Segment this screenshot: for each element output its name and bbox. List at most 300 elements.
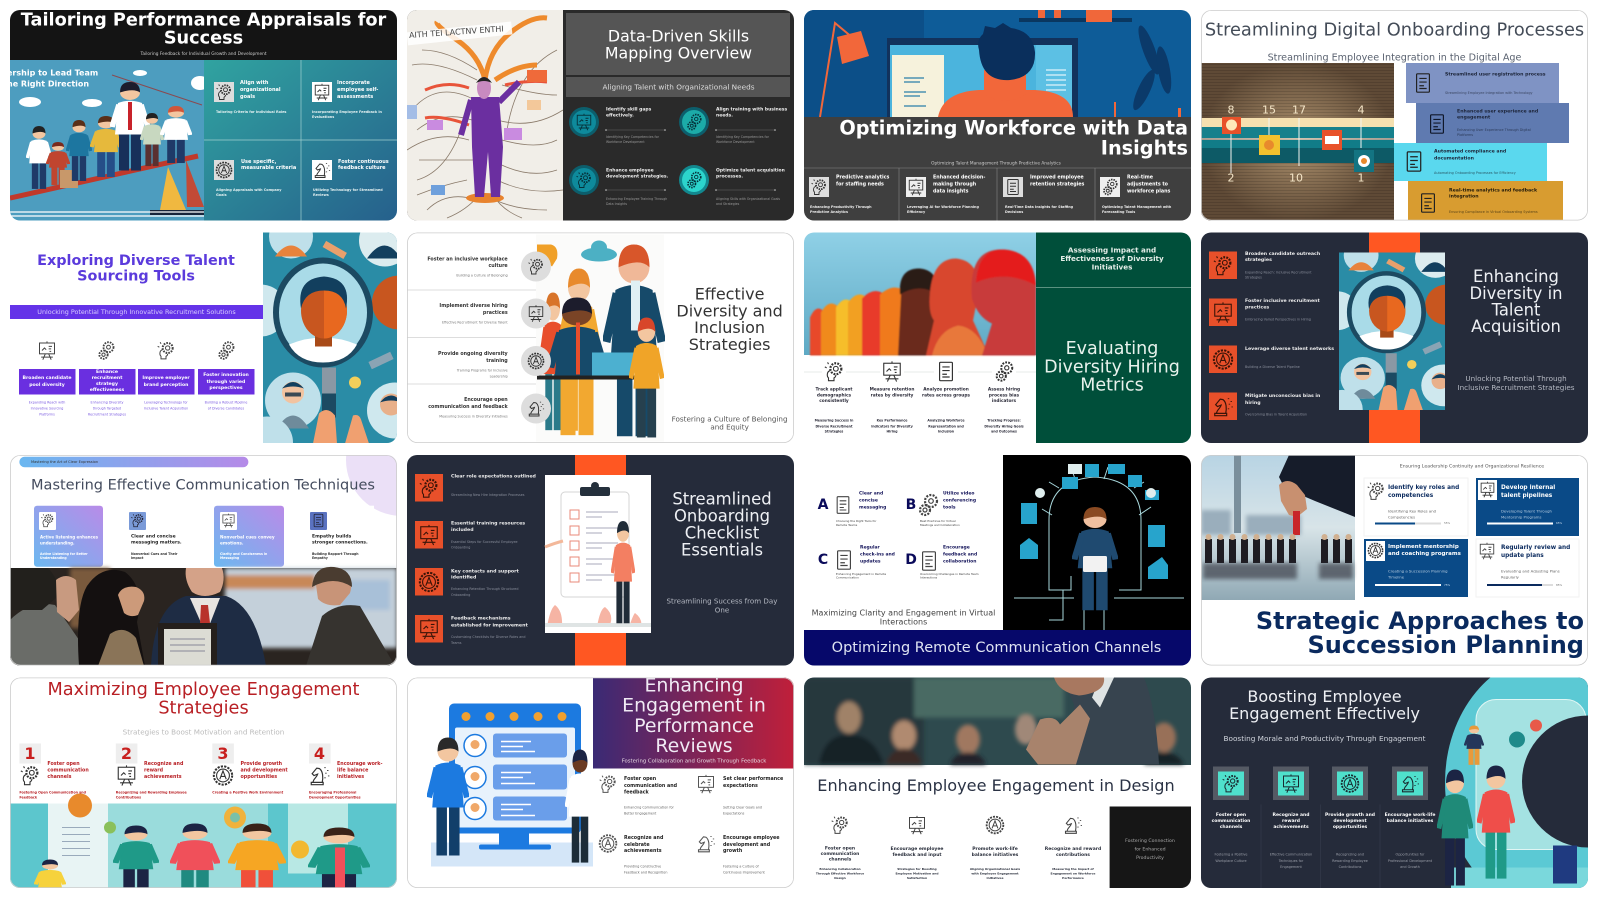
- card edge: [1201, 455, 1588, 665]
- item: role expectations: Clear role expectations outlined: [451, 474, 536, 480]
- step 1: Foster open: [47, 761, 80, 767]
- title: Essentials: [681, 540, 763, 560]
- column: feedback: Satisfaction: [907, 876, 927, 880]
- item: training: training: [486, 358, 508, 364]
- title: [48, 680, 360, 718]
- column: rewards: Engagement on Workforce: [1051, 872, 1095, 876]
- title: Maximizing Employee Engagement: [48, 680, 360, 700]
- heading: Effectiveness of Diversity: [1060, 254, 1164, 263]
- card: Maximizing Employee Engagement Strategies: [10, 678, 397, 900]
- card: Enhancing Diversity in Talent Acquisition: [1201, 232, 1588, 444]
- item: outreach: [1209, 251, 1320, 280]
- cell: review plans: Regularly: [1501, 574, 1520, 580]
- title: Tailoring Performance Appraisals for: [21, 10, 387, 30]
- item B: video: B: [906, 497, 916, 513]
- item: development strategies: Enhance employee: [606, 168, 654, 174]
- illustration: remote worker network: [1003, 455, 1191, 630]
- cell: predictive analytics: [809, 174, 889, 214]
- metric: retention: Indicators for Diversity: [871, 424, 914, 428]
- card: Strategic Approaches to Succession Planning: [1201, 455, 1588, 666]
- cell: measurable criteria: Use specific,: [241, 159, 276, 165]
- title: Strategies: [158, 698, 249, 718]
- step 4: Development Opportunities: [309, 796, 361, 800]
- caption: [812, 608, 995, 626]
- column: rewards: Performance: [1062, 876, 1084, 880]
- title: Evaluating: [1066, 339, 1158, 359]
- column: feedback: [891, 816, 943, 880]
- illustration: magnifier over candidates: [235, 214, 426, 468]
- title: Diversity in: [1469, 284, 1563, 303]
- column: recruitment: effectiveness: [90, 387, 124, 393]
- item: clear expectations: Expectations: [723, 812, 745, 816]
- illustration: teal scene with colleagues: [1439, 654, 1600, 900]
- step: experience: Platforms: [1457, 133, 1473, 137]
- metric: bias: [984, 360, 1024, 434]
- item B: video: conferencing: [943, 498, 976, 504]
- card: Evaluating Diversity Hiring Metrics: [804, 232, 1191, 444]
- cell: key roles: Competencies: [1388, 514, 1415, 520]
- item: outreach: strategies: [1245, 257, 1272, 263]
- item: training resources: Essential training resources: [451, 520, 525, 526]
- subtitle band: Unlocking Potential Through Innovative Recruitment Solutions: [37, 308, 236, 316]
- subtitle band: [10, 305, 263, 319]
- step 3: 3: [217, 744, 229, 763]
- column: feedback: Encourage employee: [891, 846, 943, 852]
- title band: [804, 630, 1191, 666]
- step 4: Encouraging Professional: [309, 790, 356, 794]
- column: feedback: Strategies for Boosting: [897, 867, 937, 871]
- item C: check-ins: [818, 544, 895, 580]
- title panel: Engagement in: [622, 694, 766, 716]
- item: training resources: [415, 520, 525, 550]
- column: candidate pool: Broaden candidate: [23, 375, 71, 381]
- step 4: [309, 744, 382, 800]
- step: experience: [1416, 103, 1569, 143]
- step 1: Fostering Open Communication and: [19, 790, 87, 794]
- card: empathy: stronger connections.: [312, 540, 368, 546]
- cell: decision making: Efficiency: [907, 210, 926, 214]
- title: [1044, 339, 1180, 396]
- cell: mentorship: Timeline: [1387, 574, 1405, 580]
- cell: feedback culture: Utilizing Technology for Streamlined: [313, 188, 383, 192]
- card: concise messaging: Nonverbal Cues and Their: [131, 552, 178, 556]
- title panel: Fostering Collaboration and Growth Through Feedback: [622, 758, 767, 764]
- item: feedback: Teams: [450, 641, 462, 645]
- card: nonverbal cues: Messaging: [220, 556, 240, 560]
- item: skill gaps: Workforce Development: [606, 140, 645, 144]
- title: Strategic Approaches to: [1256, 607, 1584, 635]
- item B: video: Best Practices for Virtual: [920, 519, 956, 523]
- metric: bias: Tracking Progress:: [987, 418, 1021, 422]
- column: rewards: contributions: [1056, 852, 1090, 858]
- item: training: Leadership: [490, 374, 508, 378]
- item: align training: Workforce Development: [716, 140, 755, 144]
- title: Checklist: [685, 524, 760, 542]
- accent strip: [1369, 232, 1420, 444]
- column: innovation: perspectives: [209, 385, 243, 391]
- cell: decision making: [906, 174, 985, 214]
- cell: real-time: workforce plans: [1127, 188, 1171, 194]
- title: Succession Planning: [1307, 631, 1584, 659]
- card: nonverbal cues: Nonverbal cues convey: [220, 534, 275, 540]
- item: celebrate: celebrate: [624, 842, 650, 848]
- step: experience: Enhancing User Experience Through Digital: [1457, 128, 1531, 132]
- item: networks: Leverage diverse talent networks: [1245, 346, 1334, 352]
- cell: review plans: Regularly review and: [1501, 545, 1570, 551]
- card: empathy: Empathy builds: [312, 534, 352, 540]
- column: work-life: Initiatives: [986, 876, 1004, 880]
- heading: Assessing Impact and: [1068, 246, 1156, 254]
- column: recognition: [1270, 766, 1312, 869]
- item: development: Fostering a Culture of: [723, 864, 759, 868]
- card: concise messaging: Clear and concise: [131, 534, 176, 540]
- item: talent acquisition: Optimize talent acquisition: [716, 168, 785, 174]
- item D: collaboration: Encourage: [943, 544, 970, 550]
- metric: demographics: [815, 360, 854, 434]
- cell: align goals: Tailoring Criteria for Individual Roles: [216, 110, 286, 114]
- card: concise messaging: [124, 506, 193, 567]
- step: experience: Enhanced user experience and: [1457, 108, 1538, 114]
- photo: hand selecting a figure: [1201, 455, 1355, 600]
- cell: align goals: [214, 80, 286, 114]
- callout box: Fostering Connection: [1125, 838, 1175, 844]
- step 2: [116, 744, 187, 800]
- card: Data-Driven Skills Mapping Overview: [407, 10, 794, 221]
- item: communication: Encourage open: [464, 397, 508, 403]
- cell: key roles: Identify key roles and: [1388, 485, 1459, 491]
- step 2: achievements: [144, 774, 182, 780]
- panel: title panel: [1036, 232, 1191, 444]
- title: Mastering Effective Communication Techniques: [31, 478, 375, 494]
- cell: decision making: Leveraging AI for Workforce Planning: [907, 205, 979, 209]
- item: talent acquisition: [679, 165, 785, 206]
- item: development strategies: Enhancing Employee Training Through: [606, 197, 667, 201]
- column: balance: [1385, 766, 1435, 869]
- item: clear expectations: Setting Clear Goals and: [723, 806, 762, 810]
- item: bias: [1209, 392, 1320, 420]
- title panel: Enhancing: [644, 674, 744, 696]
- column: innovation: Foster innovation: [203, 372, 249, 378]
- item B: video: Utilize video: [943, 490, 975, 496]
- item: open communication: feedback: [624, 790, 650, 796]
- item A: messaging: concise: [859, 498, 878, 504]
- cell: mentorship: Implement mentorship: [1388, 544, 1459, 550]
- metric: promotion: Inclusion: [938, 430, 955, 434]
- item: talent acquisition: and Strategies: [716, 202, 740, 206]
- item: bias: Overcoming Bias in Talent Acquisition: [1245, 412, 1307, 416]
- item: inclusive culture: [427, 252, 551, 282]
- subtitle box: [566, 77, 790, 97]
- column: rewards: Recognize and reward: [1045, 846, 1101, 852]
- item: clear expectations: Set clear performance: [723, 776, 784, 782]
- title: Effective: [695, 284, 765, 304]
- illustration: mind map figure: AITH TEI LACTNV ENTHI: [409, 24, 504, 40]
- column: candidate pool: Platforms: [39, 412, 55, 416]
- item: diverse hiring: practices: [483, 310, 508, 316]
- item: development: development and: [723, 842, 771, 848]
- cell: review plans: Evaluating and Adjusting Plans: [1501, 568, 1560, 574]
- item C: check-ins: updates: [860, 558, 881, 564]
- column: communication: Foster open: [1216, 812, 1246, 818]
- dark circle overlay: [1522, 716, 1600, 848]
- item B: video: [906, 490, 976, 527]
- column: recognition: Engagement: [1280, 865, 1302, 869]
- cell: mentorship: Creating a Succession Planning: [1388, 568, 1448, 574]
- column: innovation: through varied: [207, 379, 245, 385]
- cell: key roles: [1364, 478, 1468, 536]
- item: celebrate: Feedback and Recognition: [624, 870, 667, 874]
- item: skill gaps: effectively.: [606, 112, 634, 118]
- item D: collaboration: Interactions: [920, 576, 938, 580]
- illustration: timeline on wood: 17: [1292, 104, 1306, 116]
- step: compliance: [1394, 143, 1547, 181]
- cell: review plans: [1476, 539, 1579, 597]
- step 4: Encourage work-: [337, 761, 382, 767]
- item: practices: Foster inclusive recruitment: [1245, 298, 1320, 304]
- cell: key roles: competencies: [1388, 493, 1434, 499]
- title band: Optimizing Remote Communication Channels: [832, 640, 1161, 656]
- column: recognition: achievements: [1273, 824, 1309, 830]
- step 2: Recognize and: [144, 761, 184, 767]
- step: registration: Streamlining Employee Integration with Technology: [1445, 91, 1533, 95]
- column: work-life: [970, 817, 1020, 880]
- column: open communication: Foster open: [825, 846, 855, 852]
- title: [676, 284, 783, 354]
- item: networks: [1209, 346, 1334, 373]
- column: balance: and Growth: [1400, 865, 1420, 869]
- illustration: team on a seesaw boat: [7, 60, 209, 221]
- column: employer brand: [138, 342, 194, 410]
- cell: self-assessments: Incorporate: [337, 80, 371, 86]
- metric: retention: Hiring: [887, 430, 898, 434]
- step 1: communication: [47, 768, 89, 774]
- panel: four criteria: [204, 60, 397, 221]
- step: registration: [1406, 63, 1559, 103]
- cell: decision making: making through: [933, 182, 977, 188]
- cell: predictive analytics: Predictive analytics: [836, 174, 889, 180]
- item: key contacts: identified: [451, 574, 476, 580]
- accent strip: [575, 455, 626, 666]
- step: analytics: Real-time analytics and feedback: [1449, 188, 1538, 194]
- cell: retention: Real-Time Data Insights for Staffing: [1005, 205, 1074, 209]
- step: compliance: Automating Onboarding Processes for Efficiency: [1434, 171, 1516, 175]
- step 1: channels: [47, 774, 72, 780]
- title box: [566, 13, 790, 75]
- cell: retention: Improved employee: [1030, 174, 1084, 180]
- card: active listening: understanding.: [40, 540, 75, 546]
- tag pill: Mastering the Art of Clear Expression: [31, 460, 98, 464]
- item C: check-ins: C: [818, 552, 828, 568]
- item: development strategies: Data Insights: [606, 202, 627, 206]
- item D: collaboration: Overcoming Challenges in Remote Team: [920, 572, 979, 576]
- step 3: opportunities: [240, 774, 277, 780]
- step 4: initiatives: [337, 774, 364, 780]
- subtitle: Fostering a Culture of Belonging: [672, 414, 788, 424]
- item: inclusive culture: culture: [488, 263, 508, 269]
- metric: demographics: Diverse Recruitment: [816, 424, 853, 428]
- column: recruitment: strategy: [96, 381, 118, 387]
- title: [839, 116, 1188, 160]
- illustration: magnifier: [1317, 239, 1468, 429]
- step 2: Recognizing and Rewarding Employee: [116, 790, 187, 794]
- cell: talent pipelines: Developing Talent Through: [1501, 508, 1553, 514]
- item: bias: hiring: [1245, 400, 1261, 406]
- item: communication: communication and feedback: [428, 404, 509, 410]
- item: bias: Mitigate unconscious bias in: [1245, 393, 1320, 399]
- column: open communication: [816, 817, 864, 880]
- cell: self-assessments: assessments: [337, 94, 373, 100]
- subtitle: Boosting Morale and Productivity Through Engagement: [1223, 734, 1426, 743]
- cell: self-assessments: Evaluations: [312, 115, 334, 119]
- column: rewards: [1045, 818, 1101, 880]
- title: Enhancing Employee Engagement in Design: [817, 776, 1175, 795]
- cell: talent pipelines: talent pipelines: [1501, 493, 1553, 499]
- decorative corner circle: [346, 404, 458, 516]
- metric: promotion: rates across groups: [922, 392, 970, 398]
- callout box: Productivity: [1136, 855, 1164, 861]
- column: employer brand: brand perception: [144, 382, 188, 388]
- item: align training: needs.: [716, 112, 733, 118]
- item A: messaging: [818, 490, 886, 527]
- card: active listening: Active Listening for Better: [40, 552, 88, 556]
- step 3: and development: [240, 768, 288, 774]
- illustration: mind map figure: [407, 10, 563, 221]
- title: [1229, 687, 1420, 723]
- card: Streamlined Onboarding Checklist Essentials: [407, 455, 794, 666]
- heading: [1060, 246, 1164, 272]
- item C: check-ins: Regular: [860, 544, 881, 550]
- column: employer brand: Leveraging Technology for: [144, 400, 188, 404]
- item: inclusive culture: Foster an inclusive workplace: [427, 256, 508, 262]
- cell: measurable criteria: measurable criteria: [241, 165, 296, 171]
- cell: retention: retention strategies: [1030, 182, 1085, 188]
- item D: collaboration: feedback and: [943, 552, 977, 558]
- title: Sourcing Tools: [77, 268, 195, 284]
- item: networks: Building a Diverse Talent Pipeline: [1245, 365, 1300, 369]
- item A: messaging: Remote Teams: [836, 523, 858, 527]
- card: Boosting Employee Engagement Effectively: [1201, 654, 1600, 900]
- cell: talent pipelines: [1476, 478, 1579, 536]
- cell: retention: [1003, 174, 1085, 214]
- item: open communication: communication and: [624, 783, 678, 789]
- title: Streamlined: [672, 490, 772, 508]
- callout box: [1110, 806, 1192, 888]
- illustration: timeline on wood: 15: [1262, 104, 1276, 116]
- cell: mentorship: [1364, 539, 1468, 597]
- item: development: [698, 835, 780, 874]
- item: align training: Identifying Key Competencies for: [716, 135, 770, 139]
- column: rewards: Measuring the Impact of: [1052, 867, 1094, 871]
- column: candidate pool: Innovative Sourcing: [31, 406, 63, 410]
- column: communication: Workplace Culture: [1215, 859, 1247, 863]
- item: celebrate: Recognize and: [624, 835, 664, 841]
- item: outreach: Broaden candidate outreach: [1245, 251, 1320, 257]
- card: nonverbal cues: emotions.: [220, 540, 244, 546]
- metric: bias: process bias: [989, 392, 1020, 398]
- step 4: 4: [314, 744, 325, 763]
- illustration: timeline on wood: 1: [1358, 172, 1364, 184]
- item: key contacts: Key contacts and support: [451, 568, 519, 574]
- title panel: Performance: [634, 715, 754, 737]
- metric: retention: rates by diversity: [871, 392, 914, 398]
- column: recognition: Techniques for: [1278, 859, 1304, 863]
- column: recognition: Effective Communication: [1270, 852, 1312, 856]
- title: Talent: [1491, 300, 1541, 320]
- item A: messaging: A: [818, 497, 829, 513]
- column: recognition: reward: [1282, 818, 1300, 824]
- item: diverse hiring: Implement diverse hiring: [439, 303, 508, 309]
- column: work-life: Promote work-life: [972, 846, 1018, 852]
- metric: demographics: demographics: [817, 392, 852, 398]
- metric: bias: Diversity Hiring Goals: [984, 424, 1024, 428]
- column: work-life: balance initiatives: [972, 852, 1019, 858]
- column: communication: [1212, 766, 1250, 863]
- item: development strategies: development strategies.: [606, 174, 669, 180]
- item: practices: practices: [1245, 304, 1269, 310]
- item: skill gaps: Identifying Key Competencies for: [606, 135, 660, 139]
- metric: demographics: Strategies: [825, 430, 843, 434]
- item: role expectations: [415, 474, 536, 502]
- column: candidate pool: Expanding Reach with: [29, 400, 65, 404]
- subtitle: [667, 596, 777, 614]
- title panel: [593, 674, 794, 768]
- title: [672, 490, 772, 560]
- cell: self-assessments: Incorporating Employee Feedback in: [312, 110, 382, 114]
- photo: handshake at an award event: [10, 567, 397, 666]
- photo: man pointing with blurred team: [804, 678, 1191, 765]
- subtitle: and Equity: [710, 422, 750, 432]
- title: Insights: [1101, 136, 1188, 160]
- column: recruitment: recruitment: [92, 375, 123, 381]
- title: Engagement Effectively: [1229, 704, 1420, 723]
- item: development strategies: [569, 165, 669, 206]
- subtitle: Strategies to Boost Motivation and Retention: [123, 728, 284, 736]
- item: align training: Align training with business: [716, 106, 787, 112]
- column: growth: Provide growth and: [1325, 812, 1375, 818]
- callout box: for Enhanced: [1134, 846, 1166, 852]
- title: Acquisition: [1471, 317, 1561, 336]
- cell: real-time: Real-time: [1127, 174, 1154, 180]
- metric: promotion: Analyze promotion: [923, 386, 969, 392]
- item: key contacts: Enhancing Retention Through Structured: [451, 587, 518, 591]
- column: work-life: Aligning Organizational Goals: [970, 867, 1020, 871]
- illustration: team on a seesaw boat: he Right Direction: [7, 80, 89, 88]
- column: communication: channels: [1220, 824, 1243, 830]
- item D: collaboration: collaboration: [943, 558, 976, 564]
- column: recognition: Recognize and: [1273, 812, 1309, 818]
- metric: promotion: Representation and: [928, 424, 964, 428]
- item: communication: Measuring Success in Diversity Initiatives: [439, 414, 508, 418]
- subtitle: [672, 414, 788, 432]
- title: Boosting Employee: [1247, 687, 1402, 706]
- title: Diversity and: [676, 302, 783, 320]
- item: talent acquisition: Aligning Skills with Organizational Goals: [716, 197, 780, 201]
- card: nonverbal cues: [214, 506, 284, 567]
- item A: messaging: messaging: [859, 504, 886, 510]
- illustration: team on a seesaw boat: ership to Lead Team: [7, 68, 98, 78]
- column: feedback: Employee Motivation and: [896, 872, 938, 876]
- title: Enhancing: [1473, 267, 1559, 286]
- cell: feedback culture: Reviews: [313, 193, 329, 197]
- cell: predictive analytics: for staffing needs: [836, 182, 884, 188]
- column: balance: Encourage work-life: [1385, 812, 1435, 818]
- cell: feedback culture: Foster continuous: [338, 159, 389, 165]
- card: active listening: Active listening enhances: [40, 534, 99, 540]
- cell: measurable criteria: Aligning Appraisals with Company: [216, 188, 282, 192]
- metric: promotion: [922, 360, 970, 434]
- cell: align goals: goals: [240, 94, 255, 100]
- step: analytics: [1408, 181, 1563, 221]
